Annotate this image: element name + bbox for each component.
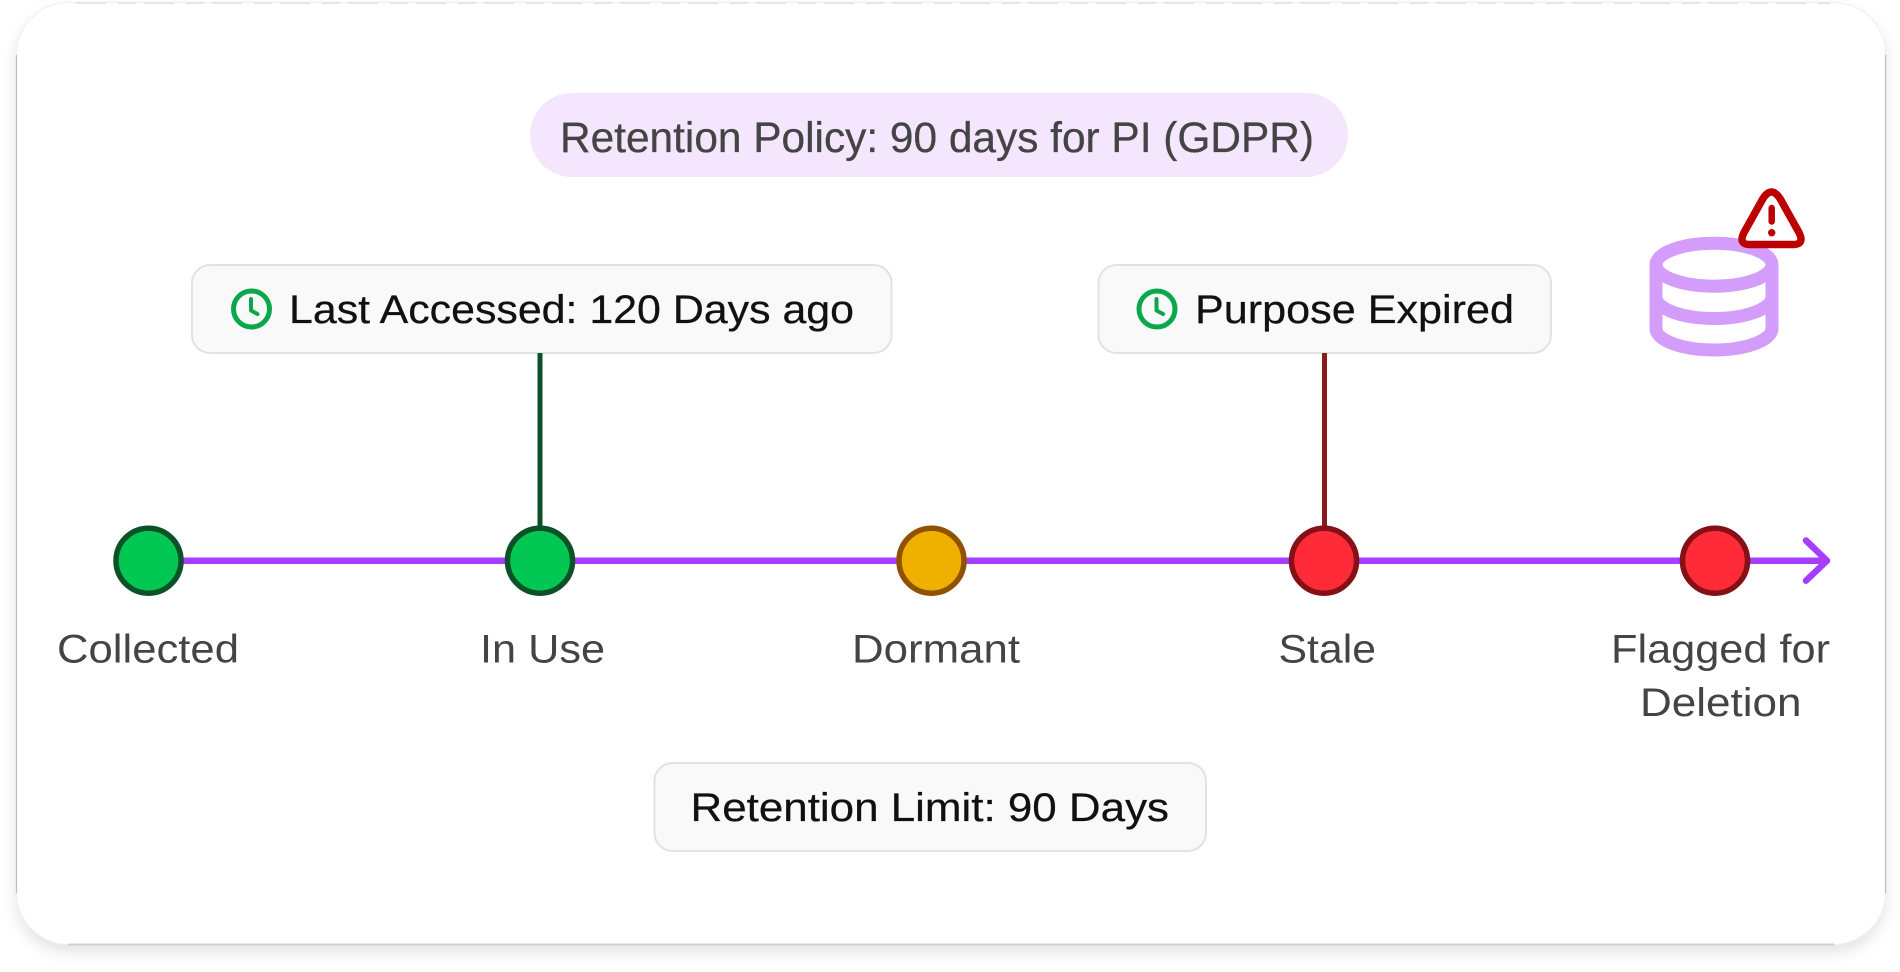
- node: in use: [508, 528, 572, 593]
- node: flagged: [1682, 528, 1748, 593]
- callout: purpose expired: Purpose Expired: [1195, 288, 1514, 332]
- node: stale: [1292, 528, 1356, 593]
- callout: last accessed: [192, 265, 892, 353]
- connector: last accessed to in use: [538, 353, 542, 527]
- timeline: [116, 528, 1827, 593]
- label: collected: Collected: [57, 628, 239, 672]
- icon: database with warning: [1656, 192, 1801, 350]
- label: in use: In Use: [480, 628, 605, 672]
- label: flagged for deletion: [1611, 628, 1830, 725]
- title pill: [530, 93, 1348, 177]
- timeline axis arrow: [148, 540, 1827, 581]
- icon: clock green: [234, 291, 270, 327]
- label: flagged for deletion: Flagged for: [1611, 628, 1830, 672]
- label: dormant: Dormant: [852, 628, 1020, 672]
- title pill: Retention Policy: 90 days for PI (GDPR): [560, 114, 1314, 162]
- connector: purpose expired to stale: [1322, 353, 1327, 527]
- label: flagged for deletion: Deletion: [1640, 681, 1802, 725]
- label: stale: Stale: [1278, 628, 1376, 672]
- callout: last accessed: Last Accessed: 120 Days ago: [289, 288, 854, 332]
- callout: purpose expired: [1098, 265, 1551, 353]
- icon: warning triangle: [1742, 192, 1801, 244]
- icon: clock green second: [1139, 291, 1175, 327]
- callout: retention limit: [654, 763, 1206, 851]
- node: dormant: [899, 528, 964, 593]
- callout: retention limit: Retention Limit: 90 Days: [690, 786, 1169, 830]
- node: collected: [116, 528, 181, 593]
